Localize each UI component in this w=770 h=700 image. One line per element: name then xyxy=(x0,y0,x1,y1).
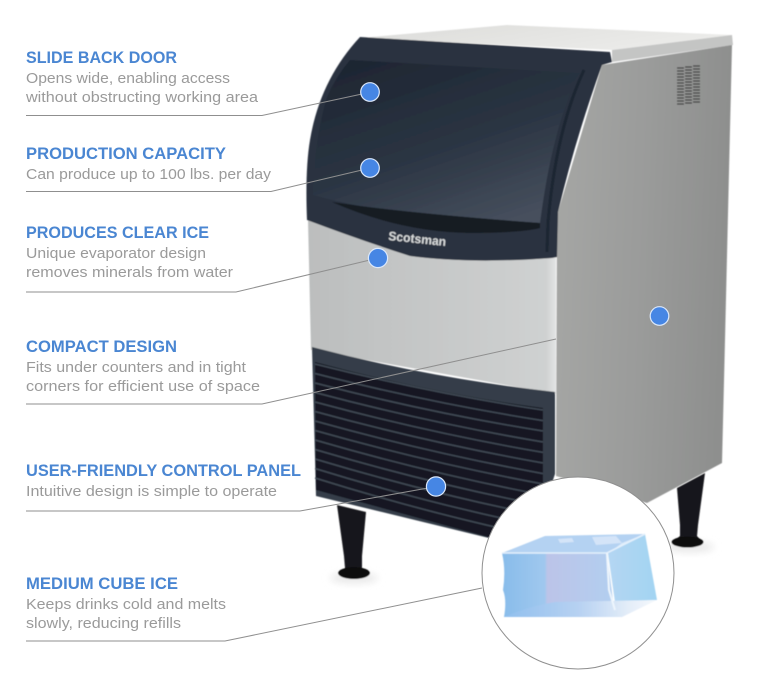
callout: user-friendly control panel: USER-FRIENDLY CONTROL PANEL xyxy=(26,461,301,480)
callout: compact design: corners for efficient use of space xyxy=(26,378,260,395)
callout: slide back door: Opens wide, enabling access xyxy=(26,70,230,87)
right leg xyxy=(672,473,705,548)
left leg xyxy=(337,505,370,579)
callout: slide back door xyxy=(25,48,362,116)
steel front panel xyxy=(308,220,556,394)
door panel xyxy=(313,60,580,223)
callout: medium cube ice: slowly, reducing refills xyxy=(26,615,181,632)
callout: compact design: Fits under counters and in tight xyxy=(26,359,247,376)
callout: compact design xyxy=(26,337,556,404)
callout: produces clear ice: Unique evaporator design xyxy=(26,245,206,262)
door handle recess xyxy=(332,202,540,233)
callout: production capacity: Can produce up to 100 lbs. per day xyxy=(26,166,272,183)
callout: user-friendly control panel: Intuitive design is simple to operate xyxy=(26,483,277,500)
hood right shading xyxy=(547,70,584,252)
machine photo illustration xyxy=(306,25,733,583)
side panel xyxy=(556,45,732,503)
ice cube inset xyxy=(482,477,674,669)
vent grille xyxy=(677,66,700,104)
callout: production capacity xyxy=(26,144,362,192)
callout: user-friendly control panel xyxy=(26,461,428,511)
ice cube xyxy=(502,534,657,617)
callout: compact design: COMPACT DESIGN xyxy=(26,337,177,356)
callout: produces clear ice: removes minerals from water xyxy=(26,264,233,281)
brand logo: Scotsman xyxy=(388,229,447,249)
hood xyxy=(306,37,612,261)
callout: slide back door: SLIDE BACK DOOR xyxy=(26,48,177,67)
lower grille xyxy=(312,347,555,552)
callout: medium cube ice: Keeps drinks cold and melts xyxy=(26,596,226,613)
callout: medium cube ice: MEDIUM CUBE ICE xyxy=(26,574,178,593)
callout: production capacity: PRODUCTION CAPACITY xyxy=(26,144,227,163)
callout: produces clear ice: PRODUCES CLEAR ICE xyxy=(26,223,209,242)
callout: slide back door: without obstructing working area xyxy=(25,89,259,106)
hotspot markers xyxy=(361,83,669,496)
callout: produces clear ice xyxy=(26,223,370,292)
callout: medium cube ice xyxy=(26,574,482,641)
top surface xyxy=(360,25,732,50)
top lip xyxy=(612,35,733,62)
